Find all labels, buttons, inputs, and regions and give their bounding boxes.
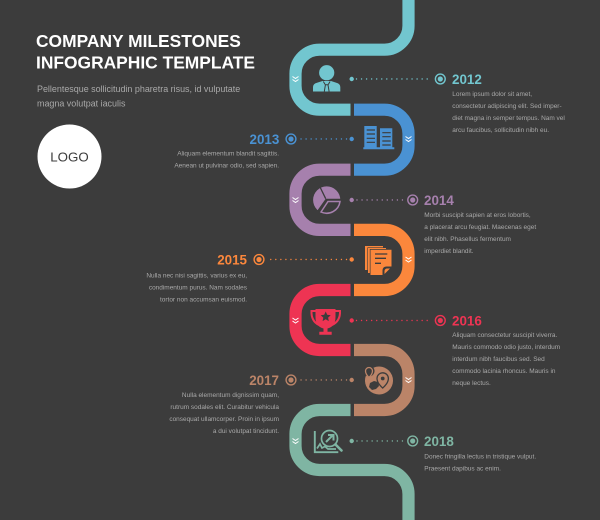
chevrons [292,76,412,444]
milestone 2017 [169,366,393,435]
milestone 2017: 2017 [249,373,279,388]
milestone 2016: neque lectus. [452,380,491,387]
icon: books [363,126,394,149]
timeline ribbon [295,0,409,520]
subtitle: magna volutpat iaculis [37,98,126,108]
milestone 2012: diet magna in semper tempus. Nam vel [452,115,565,122]
segment 2016 [296,290,350,350]
milestone 2016 [311,309,560,387]
milestone 2015: 2015 [217,252,248,267]
icon: trophy [311,309,340,335]
milestone 2016: Mauris commodo odio justo, interdum [452,344,560,351]
title: COMPANY MILESTONES [36,31,241,51]
milestone 2017: consequat ullamcorper. Proin in ipsum [169,416,279,423]
milestone 2016: commodo lacinia rhoncus. Mauris in [452,368,556,375]
milestone 2015: condimentum purus. Nam sodales [149,284,247,291]
milestone 2013 [174,126,394,169]
icon: pie chart [313,186,342,217]
milestone 2012: Lorem ipsum dolor sit amet, [452,91,532,98]
milestone 2018: Praesent dapibus ac enim. [424,465,501,472]
icon: documents [365,246,392,276]
milestone 2015 [146,246,392,303]
milestone 2016: 2016 [452,313,482,328]
milestone 2018: 2018 [424,434,454,449]
milestone 2014: 2014 [424,193,454,208]
milestone 2016: interdum nibh faucibus sed. Sed [452,356,545,363]
icon: person [313,65,340,92]
segment 2015 [354,230,409,290]
logo badge [38,124,102,188]
milestone 2017: a dui volutpat tincidunt. [213,428,279,435]
milestone 2018: Donec fringilla lectus in tristique vulput. [424,453,536,460]
milestone 2016: Aliquam consectetur suscipit viverra. [452,332,557,339]
milestone 2014: a placerat arcu feugiat. Maecenas eget [424,224,536,231]
milestone 2012: consectetur adipiscing elit. Sed imper- [452,103,562,110]
segment 2018 [296,410,408,520]
milestone 2018 [315,430,536,472]
milestone 2012 [313,65,565,134]
title: INFOGRAPHIC TEMPLATE [36,52,255,72]
milestone 2013: 2013 [250,132,279,147]
milestone 2015: tortor non accumsan euismod. [160,296,247,303]
milestone 2014 [313,186,536,255]
subtitle: Pellentesque sollicitudin pharetra risus, id vulputate [37,84,240,94]
icon: chart with magnifier [315,430,342,452]
segment 2017 [354,350,408,410]
icon: globe with pins [364,366,393,394]
milestone 2014: elit nibh. Phasellus fermentum [424,236,511,243]
milestone 2013: Aenean ut pulvinar odio, sed sapien. [174,162,279,169]
milestone 2013: Aliquam elementum blandit sagittis. [177,150,279,157]
milestone 2014: Morbi suscipit sapien at eros lobortis, [424,212,531,219]
segment 2013 [354,110,408,170]
milestone 2017: Nulla elementum dignissim quam, [182,392,279,399]
segment 2012 [296,0,408,110]
milestone 2017: rutrum sodales elit. Curabitur vehicula [170,404,279,411]
segment 2014 [295,170,350,230]
milestone 2014: imperdiet blandit. [424,248,474,255]
milestone 2012: 2012 [452,72,482,87]
milestone 2015: Nulla nec nisi sagittis, varius ex eu, [146,272,247,279]
milestone 2012: arcu faucibus, sollicitudin nibh eu. [452,127,549,134]
logo badge: LOGO [50,150,89,164]
